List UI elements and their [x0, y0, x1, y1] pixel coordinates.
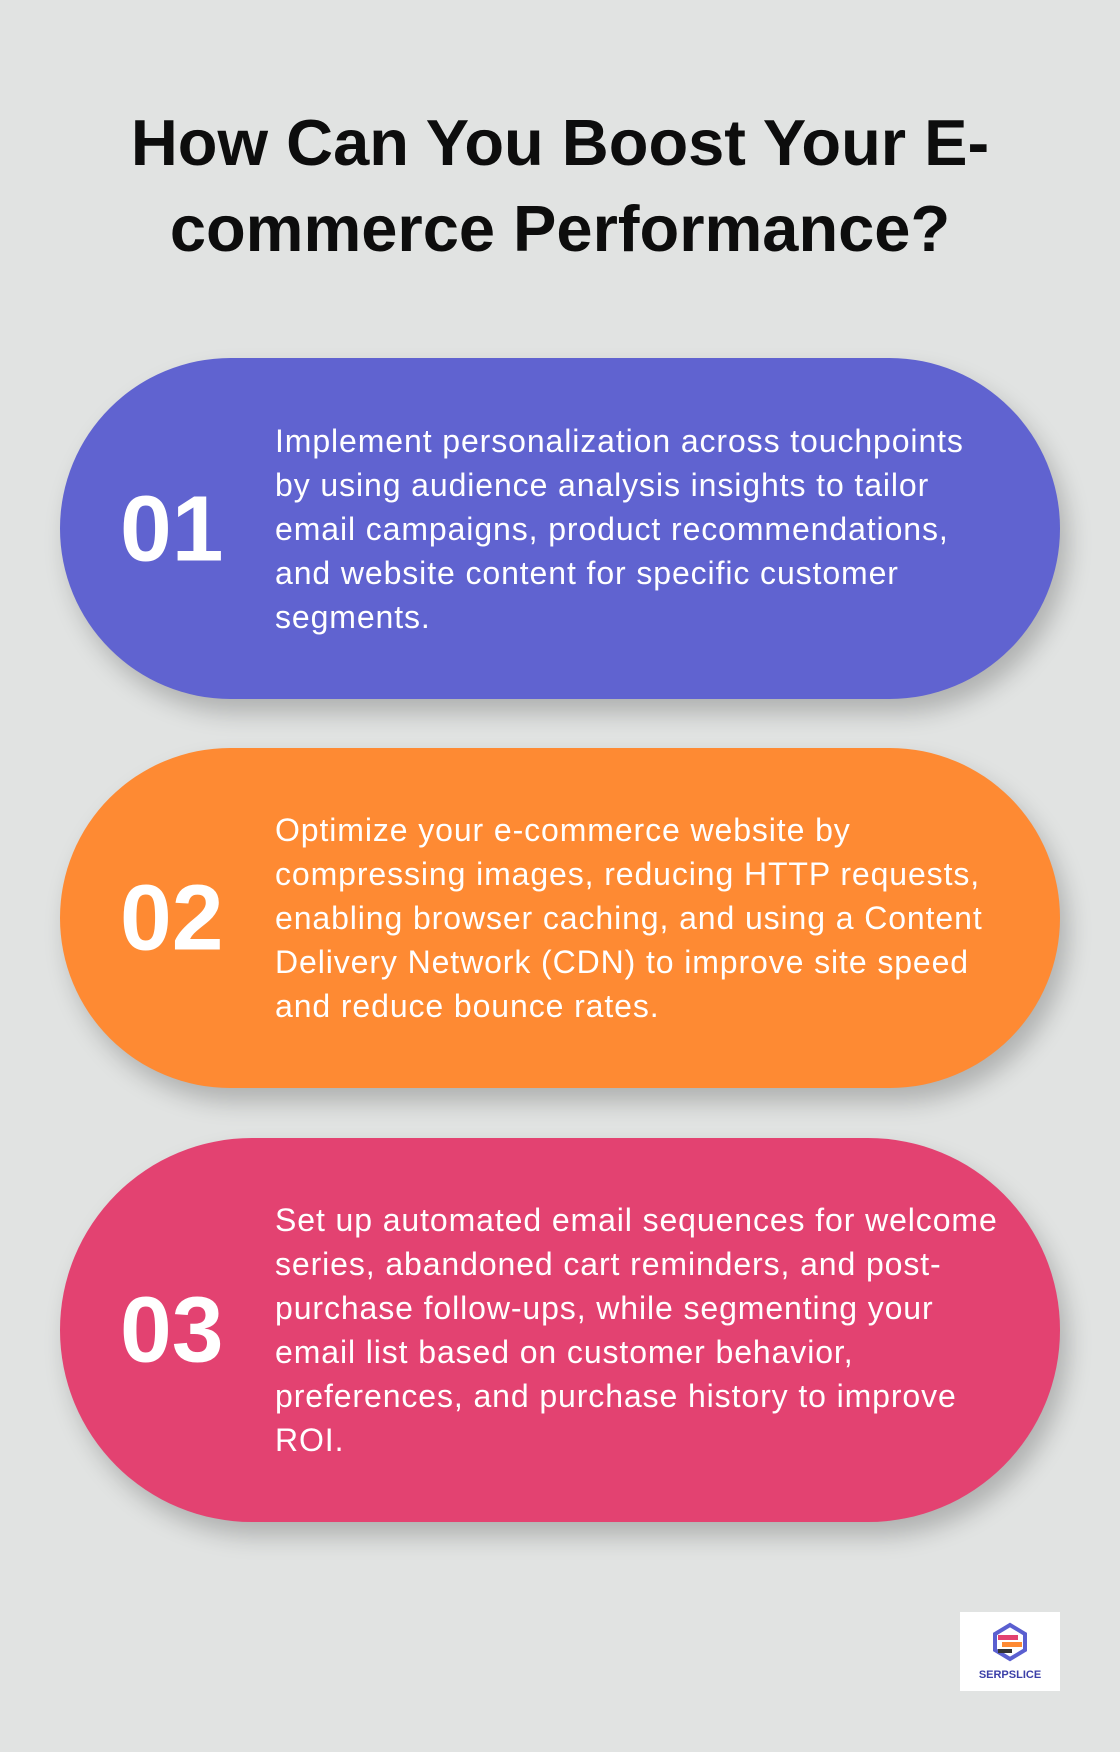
- panel: step 03: [60, 1138, 1060, 1522]
- text 03: [275, 1202, 998, 1458]
- text 02: and reduce bounce rates.: [275, 988, 660, 1024]
- number 02: 02: [120, 866, 223, 970]
- text 03: email list based on customer behavior,: [275, 1334, 853, 1370]
- text 03: purchase follow-ups, while segmenting your: [275, 1290, 934, 1326]
- text 01: Implement personalization across touchpoints: [275, 422, 964, 458]
- text 01: [275, 422, 964, 634]
- text 01: and website content for specific customer: [275, 554, 899, 590]
- text 02: Optimize your e-commerce website by: [275, 812, 851, 848]
- icon: logo mark: [993, 1622, 1027, 1662]
- logo: [960, 1612, 1060, 1691]
- panel: step 01: [60, 358, 1060, 699]
- text 01: segments.: [275, 598, 431, 634]
- text 01: email campaigns, product recommendations,: [275, 510, 949, 546]
- text 03: Set up automated email sequences for welcome: [275, 1202, 998, 1238]
- title: [131, 106, 989, 265]
- title: commerce Performance?: [170, 192, 950, 265]
- text 03: ROI.: [275, 1422, 344, 1458]
- text 03: series, abandoned cart reminders, and post-: [275, 1246, 942, 1282]
- text 02: enabling browser caching, and using a Content: [275, 900, 983, 936]
- text 01: by using audience analysis insights to tailor: [275, 466, 929, 502]
- title: How Can You Boost Your E-: [131, 106, 989, 179]
- panel: step 02: [60, 748, 1060, 1088]
- text 02: compressing images, reducing HTTP requests,: [275, 856, 980, 892]
- number 03: 03: [120, 1278, 223, 1382]
- logo text: SERPSLICE: [979, 1669, 1041, 1681]
- text 03: preferences, and purchase history to improve: [275, 1378, 957, 1414]
- text 02: [275, 812, 983, 1024]
- text 02: Delivery Network (CDN) to improve site speed: [275, 944, 969, 980]
- number 01: 01: [120, 476, 223, 580]
